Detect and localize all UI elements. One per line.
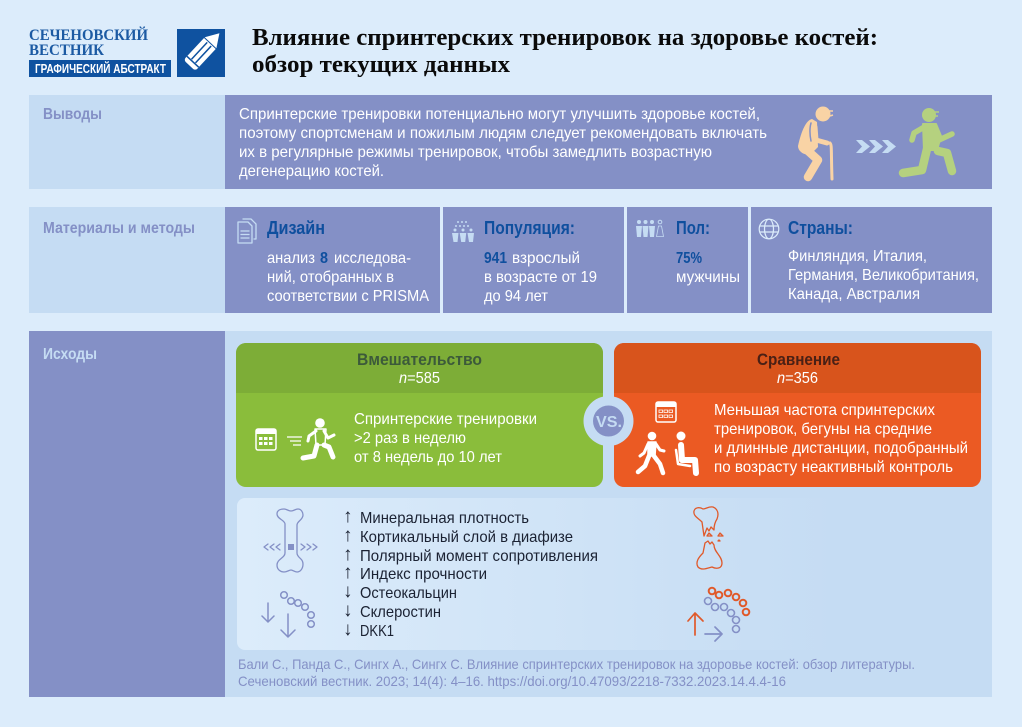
icon: seated person [676,432,696,473]
results list: ↓ [343,619,352,640]
card: population: Популяция: [484,218,575,238]
title: Влияние спринтерских тренировок на здоровье костей: [252,25,878,51]
card: design: ний, отобранных в [267,269,394,286]
intervention text: от 8 недель до 10 лет [354,449,503,466]
card: comparison: Сравнение [757,350,840,369]
icon: bone with thickening arrows [264,509,317,572]
icon: calendar [656,402,676,422]
vs badge [584,396,634,446]
results list: ↑ [343,544,352,565]
icon: people by sex [636,220,664,237]
card: sex [627,207,748,313]
card: design: исследова- [334,250,411,267]
card: design [225,207,440,313]
journal logo: ВЕСТНИК [29,42,104,59]
citation [238,656,915,689]
card: population: 941 [484,250,507,267]
icon: broken bone [694,507,723,569]
results list: ↑ [343,562,352,583]
citation: Бали С., Панда С., Сингх А., Сингх С. Влияние спринтерских тренировок на здоровье костей: обзор литературы. [238,656,915,672]
card: comparison: n=356 [777,370,818,387]
results list: Кортикальный слой в диафизе [360,529,573,546]
panel: outcome results [237,498,982,650]
journal logo: СЕЧЕНОВСКИЙ [29,25,149,44]
comparison text: Меньшая частота спринтерских [714,402,935,419]
results list: ↑ [343,506,352,527]
results list: Индекс прочности [360,566,487,583]
icon: green runner [903,108,952,173]
results list: Остеокальцин [360,585,457,602]
card: countries: Германия, Великобритания, [788,267,979,284]
card: population: взрослый [512,250,580,267]
intervention text [354,411,537,466]
card: design: анализ [267,250,315,267]
icon: elderly person with cane [798,106,833,179]
card: population: в возрасте от 19 [484,269,597,286]
results list: Склеростин [360,604,441,621]
vs badge: VS. [596,414,622,431]
results list: ↓ [343,581,352,602]
card: sex: мужчины [676,269,740,286]
conclusions text: их в регулярные режимы тренировок, чтобы замедлить возрастную [239,144,712,161]
icon: sprinter [287,418,334,458]
icon: walking person [638,432,664,473]
comparison text: тренировок, бегуны на средние [714,421,932,438]
comparison text: и длинные дистанции, подобранный [714,440,968,457]
card: countries: Финляндия, Италия, [788,248,927,265]
card: sex: 75% [676,250,702,267]
card: intervention: n=585 [399,370,440,387]
title: обзор текущих данных [252,52,510,78]
results list [343,506,598,640]
card: sex: Пол: [676,218,710,238]
results list: ↑ [343,525,352,546]
comparison text: по возрасту неактивный контроль [714,459,953,476]
journal logo [29,25,225,77]
card: population: до 94 лет [484,288,549,305]
icon: increasing and neutral markers [688,588,749,641]
results list: ↓ [343,600,352,621]
results list: DKK1 [360,623,394,640]
comparison text [714,402,968,476]
conclusions text: поэтому спортсменам и пожилым людям следует рекомендовать включать [239,125,767,142]
heading: conclusions: Выводы [43,106,102,123]
card: intervention: Вмешательство [357,350,482,369]
card: design: соответствии с PRISMA [267,288,429,305]
card: comparison [614,343,981,487]
icon: globe [759,219,779,239]
icon: crowd [452,221,474,242]
icon: arrows [856,140,896,153]
card: design: Дизайн [267,218,325,238]
conclusions text [239,106,767,180]
panel: outcomes [29,331,992,697]
results list: Полярный момент сопротивления [360,548,598,565]
conclusions text: Спринтерские тренировки потенциально могут улучшить здоровье костей, [239,106,760,123]
card: intervention [236,343,603,487]
card: countries [751,207,992,313]
panel: conclusions [29,95,992,189]
journal logo: ГРАФИЧЕСКИЙ АБСТРАКТ [35,61,166,76]
heading: materials and methods: Материалы и методы [43,220,195,237]
card: population [443,207,624,313]
icon: calendar [256,429,276,450]
title [252,25,878,78]
icon: decreasing markers [262,592,314,637]
icon: document [238,219,256,243]
heading: outcomes: Исходы [43,346,97,363]
intervention text: Спринтерские тренировки [354,411,537,428]
results list: Минеральная плотность [360,510,529,527]
citation: Сеченовский вестник. 2023; 14(4): 4–16. https://doi.org/10.47093/2218-7332.2023.14.4.4-16 [238,673,786,689]
card: design: 8 [320,250,328,267]
card: countries: Канада, Австралия [788,286,920,303]
conclusions text: дегенерацию костей. [239,163,384,180]
panel: materials and methods [29,207,992,313]
intervention text: >2 раз в неделю [354,430,466,447]
card: countries: Страны: [788,218,853,238]
